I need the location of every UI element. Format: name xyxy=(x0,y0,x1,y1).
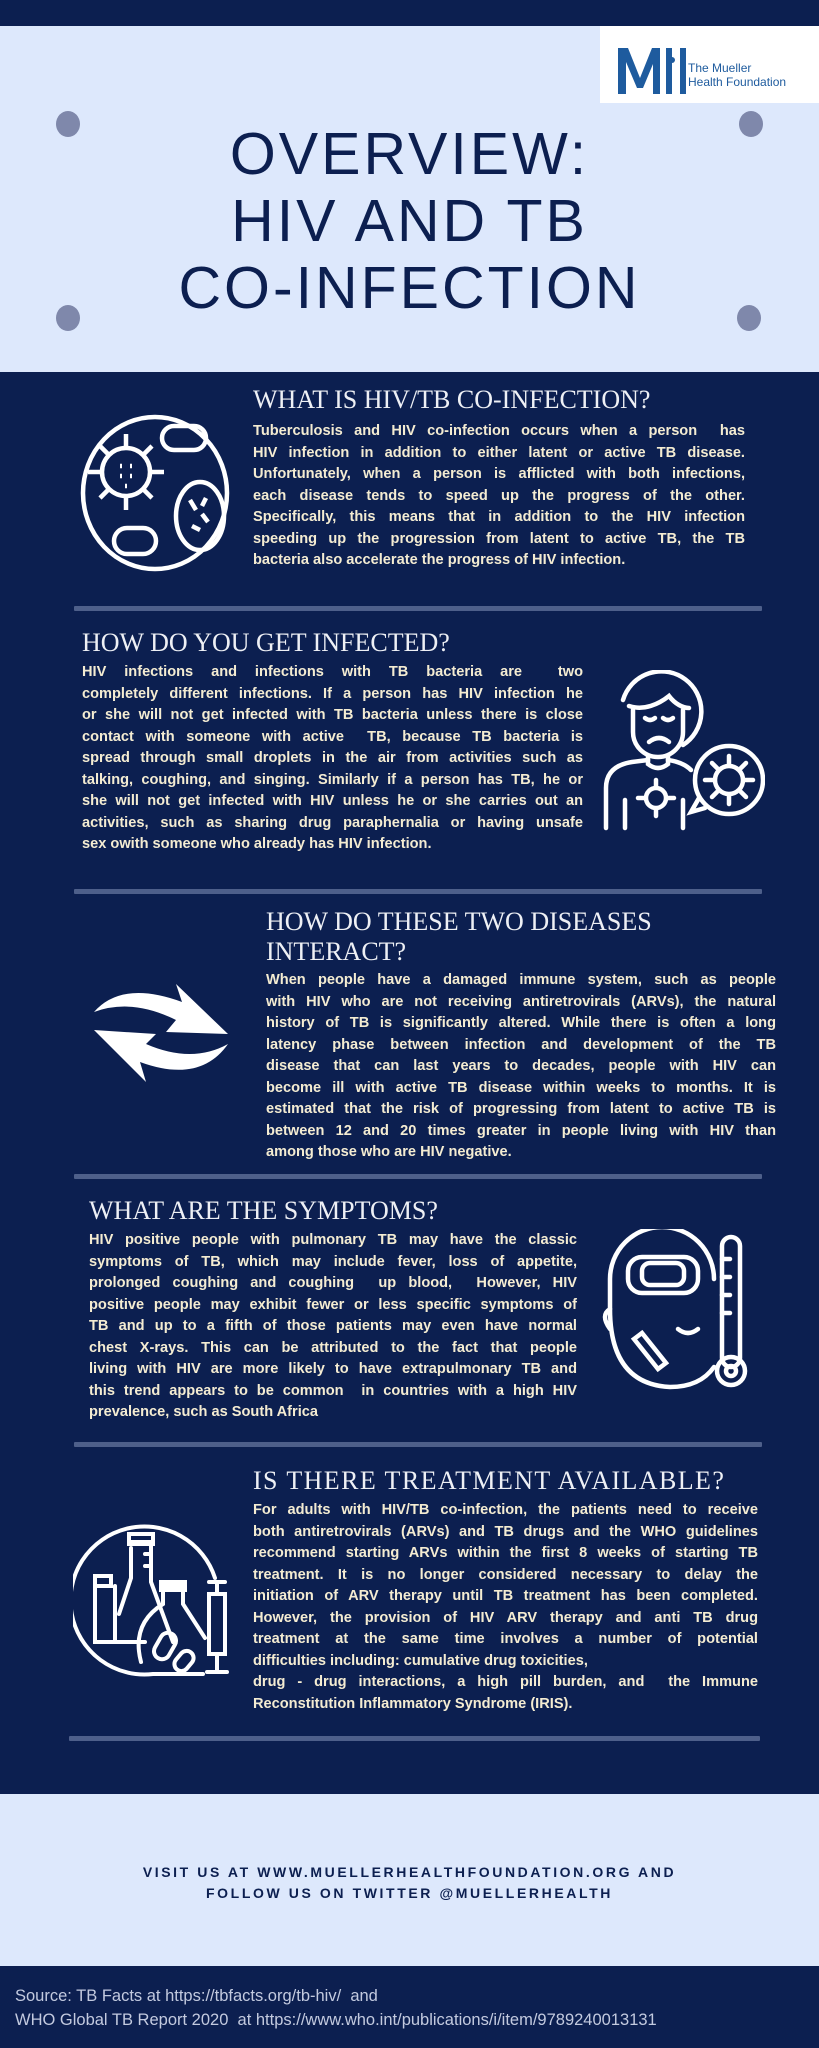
title: OVERVIEW: xyxy=(230,121,589,187)
section 5 text: For adults with HIV/TB co-infection, the patients need to receive xyxy=(253,1502,758,1518)
section 2 heading: HOW DO YOU GET INFECTED? xyxy=(82,628,450,657)
section 5 text: difficulties including: cumulative drug toxicities, xyxy=(253,1652,588,1668)
sources xyxy=(15,1987,657,2029)
footer call to action band xyxy=(0,1794,819,1966)
section 3 heading xyxy=(266,907,652,966)
section 3 text xyxy=(266,972,776,1160)
section 3 text: latency phase between infection and development of the TB xyxy=(266,1036,776,1052)
section 2 text: spread through small droplets in the air from activities such as xyxy=(82,750,583,766)
section 4 text: HIV positive people with pulmonary TB may have the classic xyxy=(89,1232,577,1248)
section 3 icon: exchange arrows xyxy=(94,984,228,1082)
section 4 heading: WHAT ARE THE SYMPTOMS? xyxy=(89,1196,438,1225)
logo: Health Foundation xyxy=(688,75,786,89)
section 1 text: HIV infection in addition to either latent or active TB disease. xyxy=(253,444,745,460)
section 4 text xyxy=(89,1232,578,1420)
section 1 text: Unfortunately, when a person is afflicted with both infections, xyxy=(253,466,745,482)
section 3 text: between 12 and 20 times greater in people living with HIV than xyxy=(266,1122,776,1138)
section 2 text: HIV infections and infections with TB bacteria are two xyxy=(82,664,583,680)
section 1 text: bacteria also accelerate the progress of HIV infection. xyxy=(253,552,625,568)
section 2 text xyxy=(82,664,583,852)
section 4 text: prolonged coughing and coughing up blood, However, HIV xyxy=(89,1275,577,1291)
section 5 text: treatment. It is no longer considered necessary to delay the xyxy=(253,1566,758,1582)
title xyxy=(178,121,641,321)
section 5 text xyxy=(253,1502,758,1712)
section 4 text: living with HIV are more likely to have extrapulmonary TB and xyxy=(89,1361,577,1377)
title: CO-INFECTION xyxy=(178,255,641,321)
section 3 text: When people have a damaged immune system, such as people xyxy=(266,972,776,988)
section 4 text: symptoms of TB, which may include fever, loss of appetite, xyxy=(89,1254,577,1270)
section 2 text: completely different infections. If a person has HIV infection he xyxy=(82,686,583,702)
section 3 text: disease that can last years to decades, people with HIV can xyxy=(266,1058,776,1074)
section 5 heading: IS THERE TREATMENT AVAILABLE? xyxy=(253,1466,725,1495)
section 1 text: Tuberculosis and HIV co-infection occurs when a person has xyxy=(253,423,745,439)
section 1 text: speeding up the progression from latent to active TB, the TB xyxy=(253,530,745,546)
section 2 text: or she will not get infected with TB bacteria unless there is close xyxy=(82,707,583,723)
section 3 text: with HIV who are not receiving antiretrovirals (ARVs), the natural xyxy=(266,994,776,1010)
section 1 heading: WHAT IS HIV/TB CO-INFECTION? xyxy=(253,385,650,414)
section 1 icon: virus and bacteria circle xyxy=(80,414,230,572)
section 5 icon: flasks pills syringe xyxy=(73,1524,229,1676)
logo xyxy=(600,26,819,103)
section 4 text: this trend appears to be common in countries with a high HIV xyxy=(89,1382,577,1398)
section 2 icon: sick person with virus xyxy=(604,670,765,830)
section 5 text: initiation of ARV therapy until TB treatment has been completed. xyxy=(253,1588,758,1604)
section 1 text: each disease tends to speed up the progress of the other. xyxy=(253,488,745,504)
decorative dots xyxy=(56,111,80,137)
header band xyxy=(0,26,819,372)
section 4 text: chest X-rays. This can be attributed to the fact that people xyxy=(89,1340,577,1356)
visit us text: FOLLOW US ON TWITTER @MUELLERHEALTH xyxy=(206,1885,613,1901)
section 5 text: drug - drug interactions, a high pill burden, and the Immune xyxy=(253,1674,758,1690)
section 3 text: among those who are HIV negative. xyxy=(266,1144,512,1160)
section 2 text: talking, coughing, and singing. Similarly if a person has TB, he or xyxy=(82,772,583,788)
section 4 text: prevalence, such as South Africa xyxy=(89,1404,318,1420)
section 1 text: Specifically, this means that in addition to the HIV infection xyxy=(253,509,745,525)
section 3 heading: INTERACT? xyxy=(266,937,406,966)
title: HIV AND TB xyxy=(231,188,588,254)
section 2 text: she will not get infected with HIV unless he or she carries out an xyxy=(82,793,583,809)
section 5 text: treatment at the same time involves a number of potential xyxy=(253,1631,758,1647)
visit us text xyxy=(143,1864,676,1901)
sources: WHO Global TB Report 2020 at https://www.who.int/publications/i/item/9789240013131 xyxy=(15,2011,657,2029)
section 2 text: sex owith someone who already has HIV infection. xyxy=(82,836,432,852)
section 5 text: However, the provision of HIV ARV therapy and anti TB drug xyxy=(253,1610,758,1626)
section 5 text: both antiretrovirals (ARVs) and TB drugs and the WHO guidelines xyxy=(253,1524,758,1540)
section 1 text xyxy=(253,423,745,568)
section 5 text: Reconstitution Inflammatory Syndrome (IRIS). xyxy=(253,1696,572,1712)
section 3 text: become ill with active TB disease within weeks to months. It is xyxy=(266,1080,776,1096)
visit us text: VISIT US AT WWW.MUELLERHEALTHFOUNDATION.ORG AND xyxy=(143,1864,676,1880)
section 5 text: recommend starting ARVs within the first 8 weeks of starting TB xyxy=(253,1545,758,1561)
section 2 text: activities, such as sharing drug paraphernalia or having unsafe xyxy=(82,814,583,830)
sources: Source: TB Facts at https://tbfacts.org/tb-hiv/ and xyxy=(15,1987,378,2005)
section 4 text: TB and up to a fifth of those patients may even have normal xyxy=(89,1318,577,1334)
section 2 text: contact with someone with active TB, because TB bacteria is xyxy=(82,728,583,744)
section 3 text: history of TB is significantly altered. While there is often a long xyxy=(266,1015,776,1031)
section 4 icon: face with thermometer xyxy=(602,1229,748,1390)
section 3 heading: HOW DO THESE TWO DISEASES xyxy=(266,907,652,936)
logo: The Mueller xyxy=(688,61,751,75)
section 4 text: positive people may exhibit fewer or less specific symptoms of xyxy=(89,1296,577,1312)
section 3 text: estimated that the risk of progressing from latent to active TB is xyxy=(266,1101,776,1117)
